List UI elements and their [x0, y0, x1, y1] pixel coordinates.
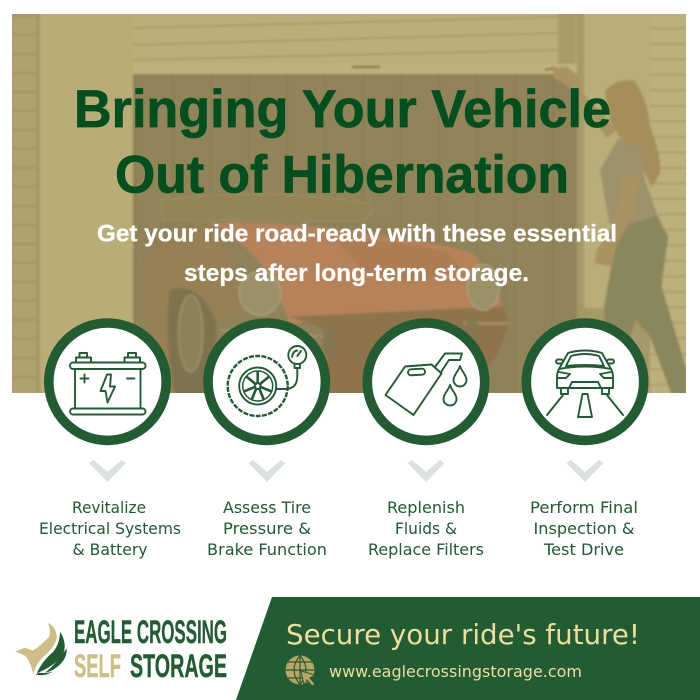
step 3 label — [368, 498, 484, 559]
step 4 label: Test Drive — [543, 540, 624, 559]
step 2 label — [207, 498, 327, 559]
subtitle: steps after long-term storage. — [184, 260, 529, 287]
step 2 label: Brake Function — [207, 540, 327, 559]
car — [168, 220, 509, 393]
step 1 label: Electrical Systems — [39, 519, 181, 538]
wordmark: STORAGE — [130, 648, 227, 684]
step 4 icon: car on road — [526, 323, 644, 440]
step 2 label: Pressure & — [223, 519, 311, 538]
title — [74, 80, 611, 204]
title: Bringing Your Vehicle — [74, 80, 611, 139]
step 2 icon: tire and pressure gauge — [208, 323, 325, 440]
step 3 label: Replace Filters — [368, 540, 484, 559]
website: www.eaglecrossingstorage.com — [329, 662, 582, 681]
wordmark: EAGLE CROSSING — [74, 614, 227, 650]
footer banner — [236, 597, 700, 700]
wordmark — [74, 614, 227, 684]
step 1 icon: battery — [49, 323, 166, 440]
background photo: woman opening storage unit with orange car — [0, 0, 700, 400]
step 4 label — [530, 498, 638, 559]
chevrons pointing to step labels — [89, 460, 604, 482]
step 4 label: Perform Final — [530, 498, 638, 517]
step 1 label: Revitalize — [72, 498, 146, 517]
icon: globe with cursor — [286, 656, 315, 686]
subtitle — [97, 220, 617, 287]
call to action: Secure your ride's future! — [286, 618, 640, 651]
wordmark: SELF — [74, 648, 121, 684]
woman — [553, 67, 687, 395]
step 4 label: Inspection & — [534, 519, 634, 538]
step 3 label: Replenish — [387, 498, 465, 517]
step 1 label: & Battery — [72, 540, 148, 559]
step 1 label — [39, 498, 181, 559]
step 2 label: Assess Tire — [223, 498, 311, 517]
eagle mark — [15, 623, 67, 675]
title: Out of Hibernation — [115, 146, 569, 204]
step 3 icon: fluid jug and drops — [367, 323, 485, 440]
step 3 label: Fluids & — [395, 519, 457, 538]
logo: Eagle Crossing Self Storage — [15, 614, 227, 684]
subtitle: Get your ride road-ready with these essential — [97, 220, 617, 248]
